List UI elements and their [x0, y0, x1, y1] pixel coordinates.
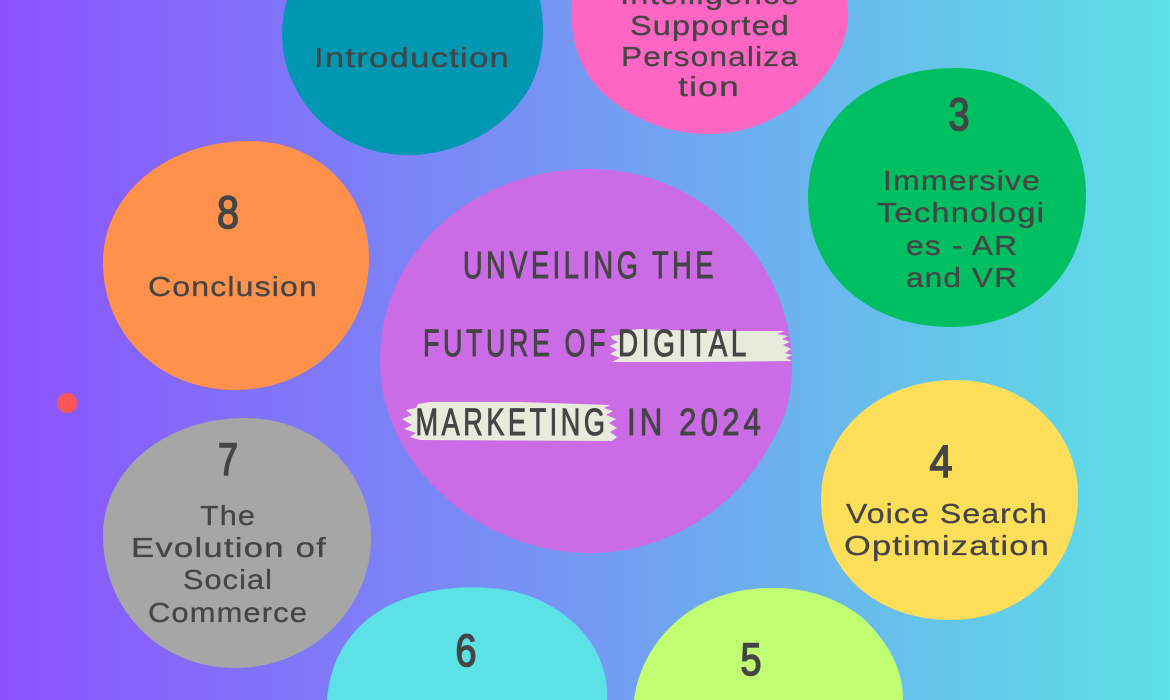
highlight: digital: [610, 329, 792, 362]
bubble 1: introduction: [282, 0, 543, 155]
highlight: marketing: [402, 402, 617, 441]
bubble 7: evolution of social commerce: Social: [183, 564, 273, 595]
bubble 3: immersive technologies: es - AR: [906, 230, 1018, 261]
bubble 4: voice search optimization: Optimization: [844, 530, 1050, 561]
bubble 2: intelligence supported personalization: Supported: [630, 10, 790, 41]
bubble 7: evolution of social commerce: Commerce: [148, 597, 308, 628]
bubble 6: [327, 587, 607, 700]
bubble 4: voice search optimization: Voice Search: [846, 498, 1048, 529]
decorative red dot: [57, 393, 77, 413]
bubble 8: conclusion: [103, 141, 369, 390]
bubble 8: conclusion: 8: [217, 187, 239, 238]
title text: MARKETING: [416, 402, 608, 444]
bubble 7: evolution of social commerce: [103, 418, 371, 668]
bubble 2: intelligence supported personalization: Personaliza: [621, 41, 799, 72]
bubble 7: evolution of social commerce: Evolution of: [131, 532, 327, 563]
central bubble: title: [380, 169, 792, 553]
bubble 4: voice search optimization: [821, 380, 1078, 620]
bubble 1: introduction: Introduction: [314, 42, 510, 73]
bubble 5: 5: [740, 634, 762, 685]
title text: FUTURE OF: [423, 323, 609, 365]
bubble 7: evolution of social commerce: 7: [218, 434, 238, 485]
bubble 4: voice search optimization: 4: [930, 436, 952, 487]
bubble 3: immersive technologies: and VR: [906, 262, 1018, 293]
title text: DIGITAL: [618, 323, 750, 365]
title text: UNVEILING THE: [463, 245, 717, 287]
bubble 2: intelligence supported personalization: tion: [678, 71, 740, 102]
title text: [416, 245, 765, 444]
bubble 2: intelligence supported personalization: [571, 0, 848, 134]
bubble 5: [634, 588, 903, 700]
bubble 7: evolution of social commerce: The: [200, 500, 256, 531]
title text: IN 2024: [627, 402, 765, 444]
bubble 6: 6: [456, 625, 476, 676]
bubble 3: immersive technologies: Technologi: [877, 197, 1045, 228]
bubble 3: immersive technologies: Immersive: [883, 165, 1041, 196]
bubble 3: immersive technologies: 3: [948, 89, 970, 140]
bubble 3: immersive technologies: [808, 68, 1086, 327]
bubble 8: conclusion: Conclusion: [148, 271, 318, 302]
